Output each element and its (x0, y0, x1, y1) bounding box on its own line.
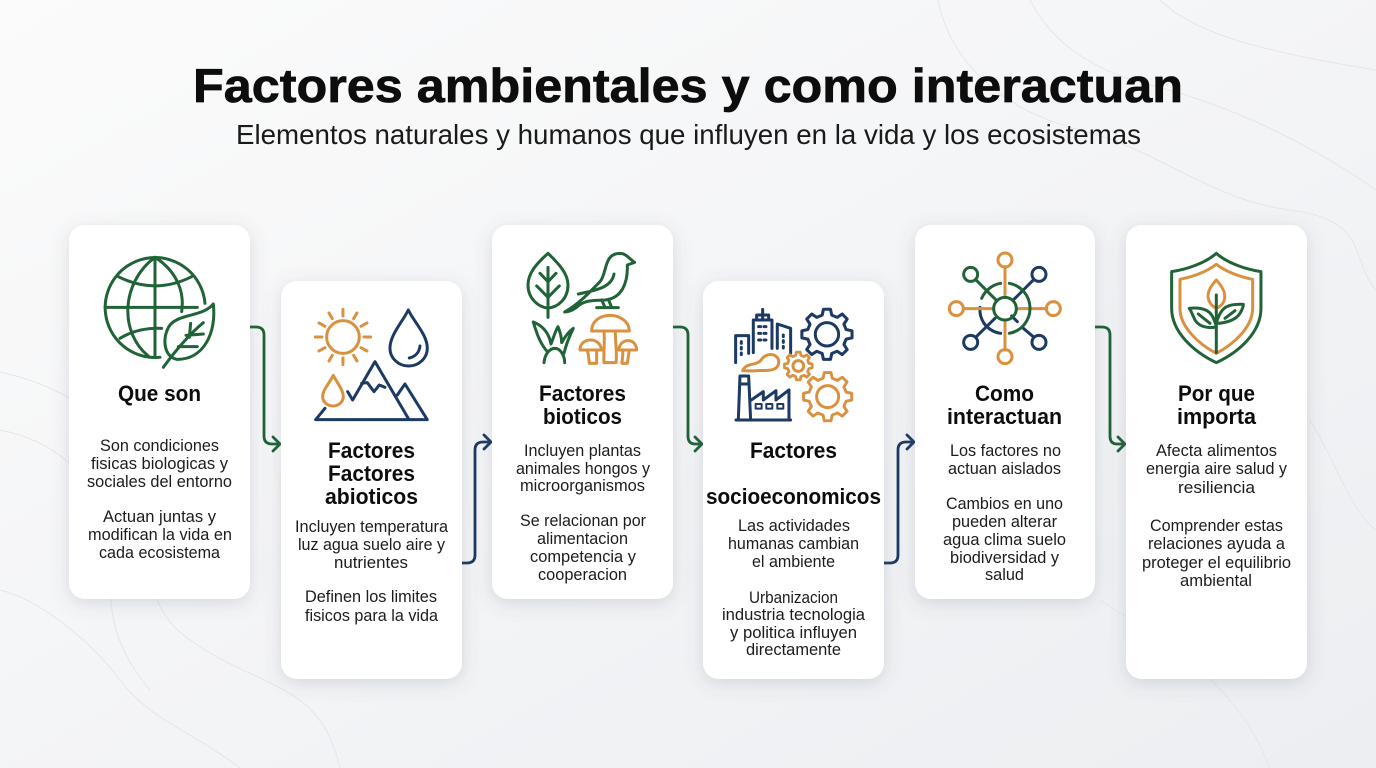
title: Factores ambientales y como interactuan (193, 59, 1183, 112)
panel: factores socioeconomicos (703, 281, 884, 679)
text block: industria tecnologia (722, 605, 866, 624)
heading: importa (1177, 404, 1257, 429)
arrow: bioticos to socioeconomicos (673, 327, 702, 451)
text block: sociales del entorno (87, 472, 232, 491)
heading: socioeconomicos (706, 484, 881, 509)
text block (87, 436, 232, 562)
panel: factores bioticos (492, 225, 673, 599)
arrow: abioticos to bioticos (462, 435, 491, 563)
text block: nutrientes (334, 553, 408, 572)
heading: Que son (118, 381, 201, 406)
text block: salud (985, 565, 1024, 584)
panel: factores abioticos (281, 281, 462, 679)
heading (947, 381, 1062, 429)
text block (295, 517, 449, 625)
icon: shield with plant (1172, 253, 1261, 363)
text block: relaciones ayuda a (1148, 534, 1286, 553)
text block: Incluyen temperatura (295, 517, 449, 536)
panel: por que importa (1126, 225, 1307, 679)
text block: Urbanizacion (749, 588, 838, 607)
text block (1142, 441, 1291, 590)
heading: Factores (539, 381, 626, 406)
heading: abioticos (325, 484, 418, 509)
text block: ambiental (1180, 571, 1252, 590)
heading (539, 381, 626, 429)
text block: modifican la vida en (88, 525, 232, 544)
text block: humanas cambian (728, 534, 859, 553)
text block: luz agua suelo aire y (298, 535, 445, 554)
heading: Como (975, 381, 1034, 406)
text block: Se relacionan por (520, 511, 646, 530)
text block: Las actividades (738, 516, 850, 535)
text block: Son condiciones (100, 436, 219, 455)
heading: Factores (328, 438, 415, 463)
heading: interactuan (947, 404, 1062, 429)
text block (943, 441, 1066, 584)
icon: globe with leaf (105, 257, 214, 367)
text block: Los factores no (950, 441, 1061, 460)
heading (706, 438, 881, 509)
arrow: como interactuan to por que importa (1095, 327, 1125, 451)
heading: bioticos (543, 404, 622, 429)
text block: el ambiente (752, 552, 835, 571)
text block: cada ecosistema (99, 543, 221, 562)
text block: competencia y (530, 547, 636, 566)
text block: animales hongos y (516, 459, 650, 478)
text block (722, 516, 866, 659)
heading: Factores (750, 438, 837, 463)
text block: cooperacion (538, 565, 627, 584)
text block: Cambios en uno (946, 494, 1063, 513)
text block: Definen los limites (305, 587, 437, 606)
icon: leaf bird grass mushrooms (528, 253, 637, 363)
panel: como interactuan (915, 225, 1095, 599)
heading (1177, 381, 1257, 429)
panel: que son (69, 225, 250, 599)
text block: Afecta alimentos (1156, 441, 1277, 460)
text block: Actuan juntas y (103, 507, 216, 526)
arrow: que son to abioticos (250, 327, 280, 451)
icon: network (949, 253, 1060, 364)
text block: agua clima suelo (943, 530, 1066, 549)
text block: proteger el equilibrio (1142, 553, 1291, 572)
text block (516, 441, 650, 584)
text block: fisicos para la vida (305, 606, 439, 625)
text block: fisicas biologicas y (91, 454, 228, 473)
text block: Incluyen plantas (524, 441, 641, 460)
text block: directamente (746, 640, 841, 659)
icon: sun water mountains (315, 309, 427, 420)
text block: alimentacion (537, 529, 628, 548)
arrow: socioeconomicos to como interactuan (884, 435, 914, 563)
text block: biodiversidad y (950, 548, 1059, 567)
heading: Factores (328, 461, 415, 486)
text block: microorganismos (520, 476, 645, 495)
heading: Por que (1178, 381, 1255, 406)
subtitle: Elementos naturales y humanos que influyen en la vida y los ecosistemas (236, 119, 1141, 150)
text block: y politica influyen (730, 623, 857, 642)
heading (325, 438, 418, 509)
text block: pueden alterar (952, 512, 1057, 531)
icon: city factory gears (736, 309, 852, 421)
text block: energia aire salud y (1146, 459, 1287, 478)
text block: resiliencia (1178, 478, 1256, 497)
text block: Comprender estas (1150, 516, 1283, 535)
text block: actuan aislados (948, 459, 1061, 478)
